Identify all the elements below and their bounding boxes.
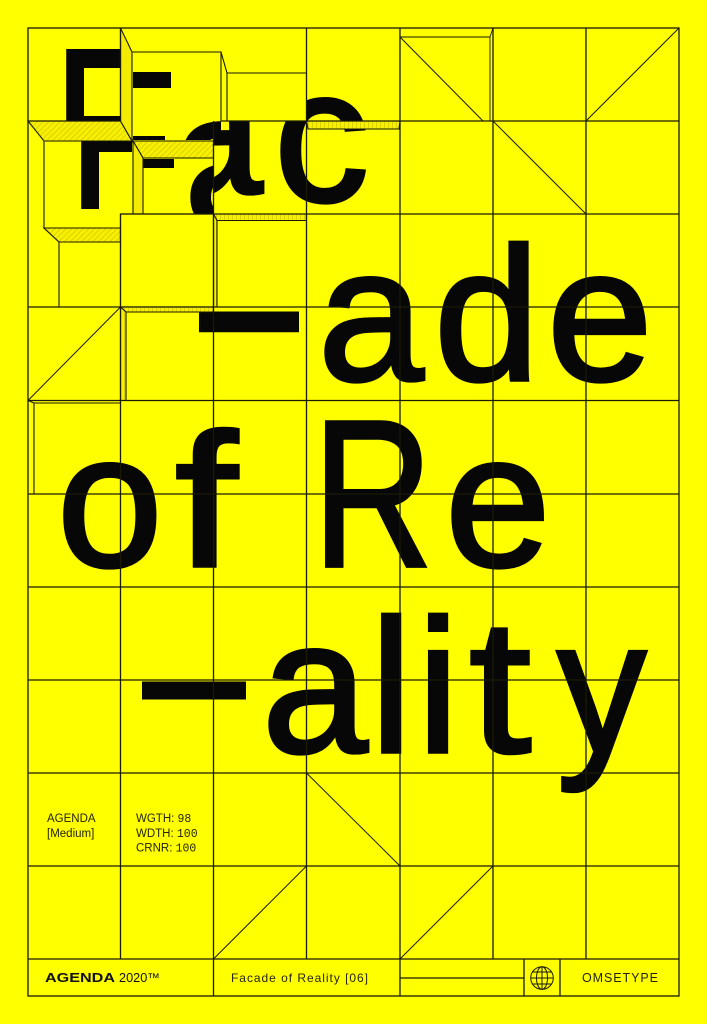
footer brand: 2020™ bbox=[119, 971, 160, 985]
panel: lower left hatched band bbox=[44, 228, 120, 242]
heading line 4: dash and ality bbox=[142, 516, 646, 817]
panel: fold top-left band bbox=[28, 121, 132, 141]
footer publisher: OMSETYPE bbox=[582, 971, 658, 985]
panel: row four band bbox=[120, 307, 214, 312]
spec text: axes: WDTH: bbox=[136, 828, 177, 840]
heading line 2: dash and ade: — bbox=[199, 119, 299, 466]
heading line 1: sliced word Fac: F bbox=[62, 22, 190, 256]
heading line 1: sliced word Fac: F bbox=[51, 0, 179, 235]
panel: row four side bbox=[120, 307, 126, 400]
panel: second band bbox=[133, 141, 214, 158]
footer brand: AGENDA bbox=[45, 971, 115, 985]
heading line 1: sliced word Fac bbox=[66, 49, 366, 214]
heading line 4: dash and ality: y bbox=[557, 581, 646, 793]
heading line 1: sliced word Fac: c bbox=[274, 30, 369, 242]
spec text: axes: WGTH: 98 bbox=[136, 813, 191, 826]
spec text: axes: 100 bbox=[176, 842, 196, 856]
heading line 1: sliced word Fac: a bbox=[157, 22, 263, 234]
folded facade panels bbox=[28, 28, 493, 494]
panel: row five fold bbox=[28, 400, 120, 494]
heading line 4: dash and ality: — bbox=[142, 516, 246, 817]
heading line 3: of Re bbox=[57, 376, 551, 610]
panel: flat square bbox=[120, 214, 214, 307]
heading line 4: dash and ality: ali bbox=[262, 581, 459, 793]
panel: top right fold bbox=[400, 28, 493, 121]
heading line 1: sliced word Fac: F bbox=[51, 6, 179, 240]
panel: second side bbox=[133, 141, 143, 214]
spec text: font name: [Medium] bbox=[47, 828, 94, 840]
panel: upper box outlines bbox=[132, 52, 306, 121]
heading line 1: sliced word Fac: F bbox=[70, 44, 198, 278]
spec text: font name: AGENDA bbox=[47, 813, 96, 825]
heading line 1: sliced word Fac: F bbox=[66, 25, 194, 260]
panel: band right of square bbox=[214, 214, 306, 220]
spec text: axes: 100 bbox=[177, 828, 198, 841]
heading line 3: of Re: e bbox=[445, 395, 551, 607]
heading line 3: of Re: f bbox=[175, 395, 239, 607]
heading line 1: sliced word Fac: a bbox=[172, 54, 278, 266]
heading line 3: of Re: R bbox=[313, 376, 432, 610]
panel: lower left box bbox=[44, 141, 120, 307]
heading line 2: dash and ade: ade bbox=[318, 209, 653, 421]
spec text: axes: CRNR: bbox=[136, 842, 176, 854]
heading line 1: sliced word Fac: a bbox=[184, 54, 290, 266]
heading line 1: sliced word Fac: F bbox=[66, 25, 194, 260]
heading line 3: of Re: o bbox=[57, 395, 163, 607]
footer title: Facade of Reality [06] bbox=[231, 971, 368, 985]
panel: fold side upper bbox=[120, 28, 132, 141]
icon: globe bbox=[531, 967, 553, 989]
panel: side right of square bbox=[214, 214, 217, 307]
panel: c band bbox=[306, 121, 400, 129]
heading line 4: dash and ality: t bbox=[469, 581, 531, 793]
heading line 1: sliced word Fac: F bbox=[62, 27, 190, 262]
heading line 2: dash and ade bbox=[199, 119, 653, 466]
